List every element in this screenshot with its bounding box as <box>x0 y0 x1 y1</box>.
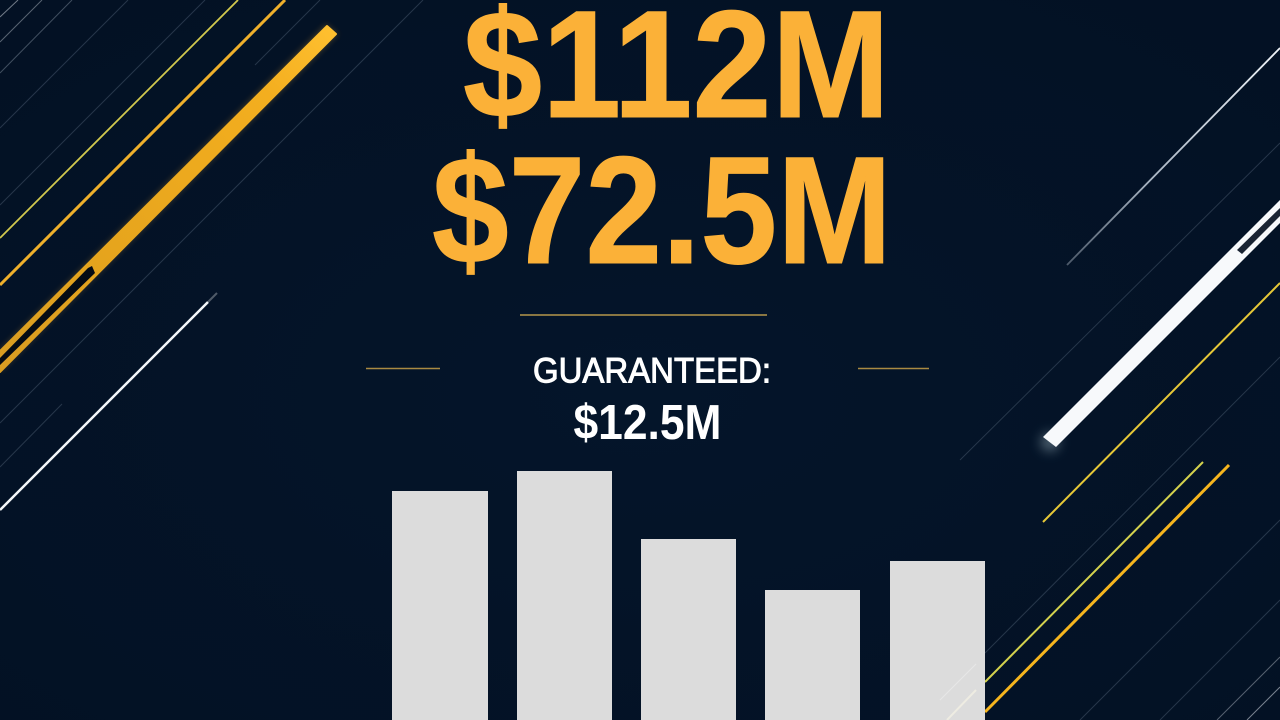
value: $12.5M: $12.5M <box>574 396 722 450</box>
divider left <box>366 368 440 370</box>
decorative streak: thin gold lines left <box>0 0 285 285</box>
divider <box>520 314 767 316</box>
decorative streaks: gold right <box>985 283 1280 712</box>
decorative streak: white right thin <box>1067 48 1280 265</box>
divider right <box>858 368 929 370</box>
decorative streak: thick gold bar <box>0 24 338 372</box>
label: guaranteed: GUARANTEED: <box>533 352 771 390</box>
decorative streak: thick white bar <box>1041 200 1280 451</box>
bar chart <box>392 471 985 720</box>
headline: $72.5M: $72.5M <box>432 125 892 296</box>
decorative streak: white left <box>0 293 217 510</box>
